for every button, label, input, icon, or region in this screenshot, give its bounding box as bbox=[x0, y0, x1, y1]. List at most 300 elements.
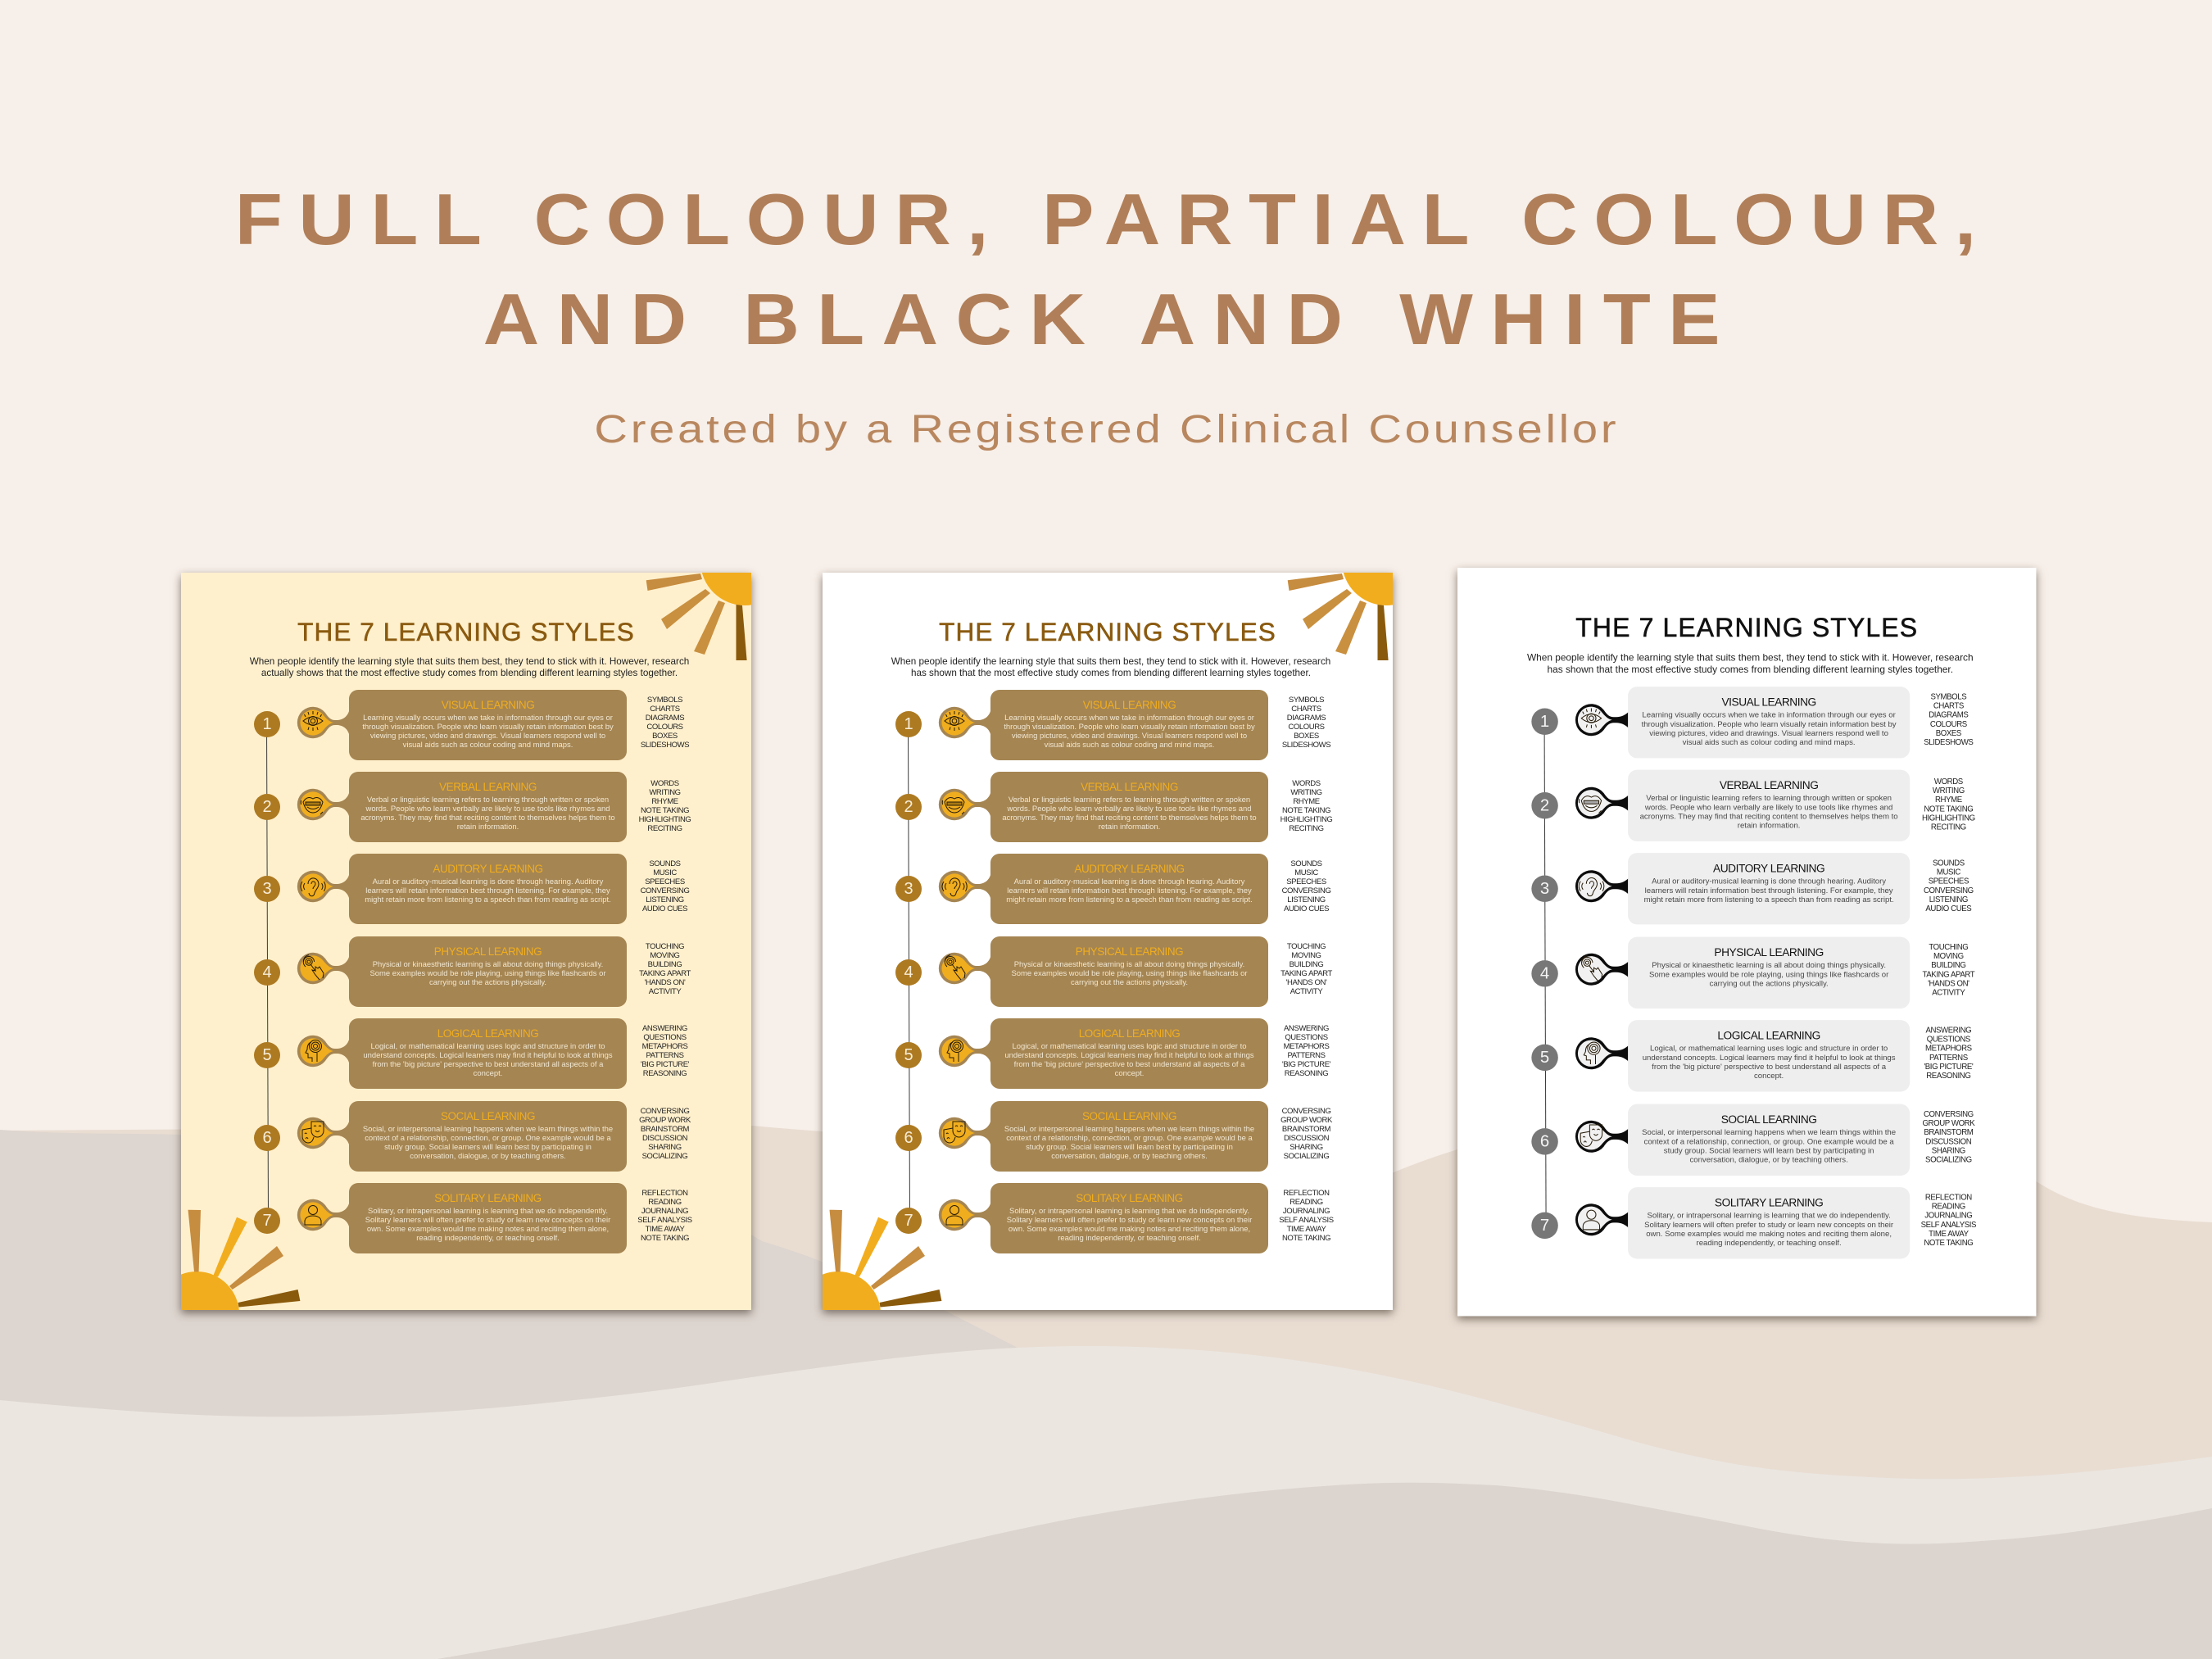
card: logical learning: from the 'big picture' perspective to best understand all aspects of a bbox=[373, 1060, 603, 1068]
keywords: logical: REASONING bbox=[1926, 1072, 1970, 1081]
card: logical learning: Logical, or mathematical learning uses logic and structure in order to bbox=[1650, 1044, 1888, 1053]
row 6: social bbox=[254, 1101, 691, 1172]
keywords: physical: ACTIVITY bbox=[649, 987, 681, 996]
icon: eye bbox=[297, 706, 349, 739]
keywords: verbal: RECITING bbox=[1931, 823, 1966, 832]
card: physical learning: Physical or kinaesthetic learning is all about doing things physically. bbox=[1014, 960, 1244, 968]
keywords: auditory: CONVERSING bbox=[1282, 886, 1330, 895]
card: visual learning: through visualization. People who learn visually retain information best by bbox=[1004, 723, 1255, 731]
number 6: 6 bbox=[262, 1129, 272, 1147]
number 3: 3 bbox=[904, 880, 913, 898]
sun: bottom left bbox=[823, 1209, 942, 1310]
keywords: physical: MOVING bbox=[1291, 951, 1321, 960]
keywords: auditory bbox=[641, 859, 690, 913]
keywords: auditory: CONVERSING bbox=[641, 886, 689, 895]
row 1: visual bbox=[1457, 687, 2036, 758]
row 5: logical bbox=[1457, 1020, 2036, 1091]
card: visual learning bbox=[990, 690, 1268, 760]
keywords: auditory: LISTENING bbox=[1929, 895, 1968, 904]
heading block bbox=[235, 179, 1976, 451]
row 2: verbal bbox=[254, 772, 691, 842]
icon: hand bbox=[297, 952, 349, 985]
keywords: solitary: TIME AWAY bbox=[646, 1225, 684, 1234]
keywords: logical: METAPHORS bbox=[1284, 1042, 1329, 1051]
icon: masks bbox=[297, 1117, 349, 1149]
card: auditory learning: AUDITORY LEARNING bbox=[433, 863, 543, 875]
card: physical learning: Physical or kinaesthetic learning is all about doing things physically. bbox=[373, 960, 603, 968]
number 4 bbox=[1531, 960, 1558, 987]
card: physical learning: carrying out the actions physically. bbox=[429, 978, 546, 986]
keywords: visual: SYMBOLS bbox=[647, 696, 682, 705]
keywords: verbal: NOTE TAKING bbox=[1924, 805, 1973, 814]
row 3: auditory bbox=[1457, 853, 2036, 924]
card: solitary learning: own. Some examples would me making notes and reciting them alone, bbox=[1009, 1224, 1250, 1234]
keywords: logical: 'BIG PICTURE' bbox=[641, 1060, 689, 1069]
main title: FULL COLOUR, PARTIAL COLOUR, bbox=[235, 179, 1976, 260]
card: solitary learning: reading independently, or teaching onself. bbox=[1697, 1239, 1842, 1248]
card: auditory learning: might retain more from listening to a speech than from reading as script. bbox=[1006, 895, 1253, 904]
keywords: auditory: AUDIO CUES bbox=[1284, 904, 1329, 913]
icon: person bbox=[1571, 1199, 1631, 1240]
row 1: visual bbox=[254, 690, 690, 760]
sun: top right bbox=[646, 573, 751, 660]
card: physical learning bbox=[990, 936, 1268, 1006]
card: social learning bbox=[990, 1101, 1268, 1172]
card: visual learning: VISUAL LEARNING bbox=[1721, 696, 1816, 708]
intro text bbox=[1501, 653, 2000, 675]
number 6 bbox=[1531, 1128, 1558, 1155]
keywords: physical: 'HANDS ON' bbox=[645, 978, 685, 987]
card: visual learning: viewing pictures, video and drawings. Visual learners respond well to bbox=[1649, 728, 1888, 738]
card: physical learning: Some examples would be role playing, using things like flashcards or bbox=[370, 968, 606, 978]
keywords: verbal: RHYME bbox=[1293, 797, 1320, 806]
card: solitary learning: Solitary, or intrapersonal learning is learning that we do independently. bbox=[1647, 1211, 1891, 1220]
card: auditory learning: learners will retain information best through listening. For example, they bbox=[365, 886, 610, 895]
intro text: When people identify the learning style that suits them best, they tend to stick with it. However, research bbox=[1527, 653, 1974, 664]
icon: person bbox=[297, 1199, 349, 1231]
keywords: logical: ANSWERING bbox=[642, 1024, 687, 1033]
keywords: logical: QUESTIONS bbox=[643, 1033, 687, 1042]
keywords: visual: BOXES bbox=[1294, 732, 1319, 741]
card: solitary learning: reading independently, or teaching onself. bbox=[416, 1234, 560, 1242]
card: verbal learning: words. People who learn verbally are likely to use tools like rhymes and bbox=[1008, 805, 1251, 813]
keywords: verbal: WRITING bbox=[649, 788, 681, 797]
card: physical learning: Some examples would be role playing, using things like flashcards or bbox=[1011, 968, 1247, 978]
keywords: solitary bbox=[637, 1189, 692, 1243]
row 3: auditory bbox=[895, 854, 1330, 924]
card: logical learning: LOGICAL LEARNING bbox=[1079, 1027, 1180, 1040]
number 5: 5 bbox=[904, 1046, 913, 1064]
card: solitary learning: Solitary learners will often prefer to study or learn new concepts on their bbox=[1644, 1220, 1893, 1229]
card: visual learning: Learning visually occurs when we take in information through our eyes or bbox=[363, 713, 613, 723]
number 4: 4 bbox=[1540, 964, 1549, 982]
keywords: verbal: RHYME bbox=[1935, 796, 1962, 805]
card: logical learning: concept. bbox=[1115, 1068, 1144, 1078]
card: social learning bbox=[1628, 1104, 1910, 1175]
card: auditory learning: might retain more from listening to a speech than from reading as script. bbox=[365, 895, 611, 904]
card: auditory learning: AUDITORY LEARNING bbox=[1074, 863, 1185, 875]
keywords: social: DISCUSSION bbox=[1925, 1138, 1971, 1147]
keywords: solitary: READING bbox=[1932, 1203, 1965, 1212]
card: auditory learning: learners will retain information best through listening. For example, they bbox=[1645, 886, 1893, 895]
keywords: logical: 'BIG PICTURE' bbox=[1924, 1063, 1973, 1072]
keywords: solitary bbox=[1906, 1194, 1991, 1249]
keywords: logical bbox=[1265, 1024, 1348, 1078]
keywords: social: SHARING bbox=[1290, 1143, 1323, 1152]
keywords: visual: SYMBOLS bbox=[1930, 693, 1966, 702]
keywords: visual: COLOURS bbox=[1288, 723, 1325, 732]
keywords: social: GROUP WORK bbox=[1281, 1116, 1332, 1125]
keywords: visual bbox=[641, 696, 690, 750]
keywords: visual: SLIDESHOWS bbox=[1282, 741, 1330, 750]
card: social learning: Social, or interpersonal learning happens when we learn things within the bbox=[1004, 1124, 1254, 1134]
card: logical learning: Logical, or mathematical learning uses logic and structure in order to bbox=[371, 1042, 605, 1050]
keywords: physical: TAKING APART bbox=[639, 969, 691, 978]
keywords: logical bbox=[1906, 1027, 1991, 1081]
number 1: 1 bbox=[262, 715, 272, 733]
icon: hand bbox=[939, 952, 990, 985]
keywords: social: CONVERSING bbox=[641, 1107, 689, 1116]
card: logical learning bbox=[349, 1018, 627, 1088]
card: social learning: SOCIAL LEARNING bbox=[1721, 1113, 1816, 1126]
card: logical learning: understand concepts. Logical learners may find it helpful to look at things bbox=[363, 1050, 613, 1060]
row 1: visual bbox=[895, 690, 1330, 760]
keywords: logical: QUESTIONS bbox=[1285, 1033, 1328, 1042]
number 2 bbox=[254, 794, 280, 820]
keywords: auditory: AUDIO CUES bbox=[1925, 904, 1971, 914]
card: visual learning: visual aids such as colour coding and mind maps. bbox=[1683, 738, 1856, 747]
keywords: social: SHARING bbox=[648, 1143, 682, 1152]
icon: hand bbox=[1571, 949, 1631, 990]
card: logical learning: from the 'big picture' perspective to best understand all aspects of a bbox=[1652, 1062, 1886, 1072]
icon: ear bbox=[939, 870, 990, 903]
keywords: verbal: RECITING bbox=[647, 824, 682, 833]
keywords: visual: DIAGRAMS bbox=[646, 714, 684, 723]
keywords: physical: BUILDING bbox=[1290, 960, 1323, 969]
keywords: verbal: WORDS bbox=[650, 779, 679, 788]
number 2: 2 bbox=[262, 798, 272, 816]
keywords: auditory: SPEECHES bbox=[645, 877, 685, 886]
keywords: logical bbox=[641, 1024, 689, 1078]
keywords: social: GROUP WORK bbox=[1922, 1119, 1974, 1129]
keywords: social: BRAINSTORM bbox=[1924, 1129, 1973, 1138]
keywords: physical: ACTIVITY bbox=[1932, 989, 1965, 998]
keywords: visual: COLOURS bbox=[1930, 720, 1967, 729]
card: physical learning: PHYSICAL LEARNING bbox=[434, 945, 542, 958]
keywords: logical: 'BIG PICTURE' bbox=[1282, 1060, 1330, 1069]
card: social learning: study group. Social learners will learn best by participating in bbox=[1026, 1142, 1233, 1152]
card: verbal learning: Verbal or linguistic learning refers to learning through written or spoken bbox=[1009, 795, 1250, 805]
keywords: solitary: JOURNALING bbox=[1283, 1207, 1330, 1216]
card: logical learning: concept. bbox=[474, 1068, 502, 1078]
card: solitary learning: SOLITARY LEARNING bbox=[434, 1192, 542, 1204]
card: social learning: SOCIAL LEARNING bbox=[1082, 1110, 1176, 1122]
keywords: solitary: SELF ANALYSIS bbox=[637, 1216, 692, 1225]
row 2: verbal bbox=[895, 772, 1332, 842]
keywords: solitary: READING bbox=[1290, 1198, 1323, 1207]
page title: THE 7 LEARNING STYLES bbox=[939, 617, 1276, 646]
card: solitary learning: SOLITARY LEARNING bbox=[1715, 1196, 1823, 1208]
card: social learning: SOCIAL LEARNING bbox=[441, 1110, 535, 1122]
number 5 bbox=[1531, 1045, 1558, 1071]
card: solitary learning: Solitary learners will often prefer to study or learn new concepts on their bbox=[1007, 1216, 1252, 1224]
icon: head bbox=[297, 1036, 349, 1067]
keywords: social bbox=[1265, 1107, 1348, 1161]
card: visual learning: viewing pictures, video and drawings. Visual learners respond well to bbox=[370, 731, 605, 741]
keywords: visual: CHARTS bbox=[650, 705, 680, 714]
card: logical learning: Logical, or mathematical learning uses logic and structure in order to bbox=[1013, 1042, 1246, 1050]
panel: partial colour white version bbox=[823, 573, 1393, 1310]
number 1 bbox=[254, 711, 280, 737]
keywords: logical: METAPHORS bbox=[642, 1042, 687, 1051]
number 6: 6 bbox=[904, 1129, 913, 1147]
number 4 bbox=[895, 959, 922, 986]
timeline line bbox=[908, 724, 910, 1221]
card: physical learning: Physical or kinaesthetic learning is all about doing things physically. bbox=[1652, 961, 1886, 970]
sun: bottom left bbox=[181, 1209, 300, 1310]
keywords: solitary: REFLECTION bbox=[1925, 1194, 1972, 1203]
keywords: verbal: HIGHLIGHTING bbox=[639, 815, 691, 824]
keywords: physical: 'HANDS ON' bbox=[1928, 980, 1969, 989]
number 3 bbox=[1531, 876, 1558, 902]
keywords: logical: PATTERNS bbox=[646, 1051, 684, 1060]
card: visual learning: viewing pictures, video and drawings. Visual learners respond well to bbox=[1012, 731, 1247, 741]
card: solitary learning bbox=[990, 1183, 1268, 1253]
keywords: visual: CHARTS bbox=[1291, 705, 1321, 714]
card: social learning: study group. Social learners will learn best by participating in bbox=[384, 1142, 592, 1152]
keywords: social: SOCIALIZING bbox=[1284, 1152, 1329, 1161]
row 6: social bbox=[823, 1101, 1393, 1172]
keywords: visual bbox=[1906, 693, 1991, 748]
row 4: physical bbox=[1457, 937, 2036, 1009]
keywords: visual: SLIDESHOWS bbox=[1924, 738, 1973, 748]
number 5: 5 bbox=[262, 1046, 272, 1064]
keywords: solitary: READING bbox=[648, 1198, 682, 1207]
number 4: 4 bbox=[262, 963, 272, 981]
card: logical learning bbox=[990, 1018, 1268, 1088]
card: verbal learning: retain information. bbox=[1099, 823, 1160, 831]
keywords: logical: QUESTIONS bbox=[1927, 1036, 1970, 1045]
keywords: auditory: CONVERSING bbox=[1924, 886, 1974, 895]
number 6: 6 bbox=[1540, 1132, 1549, 1151]
number 4: 4 bbox=[904, 963, 913, 981]
keywords: solitary: SELF ANALYSIS bbox=[1921, 1221, 1976, 1230]
row 5: logical bbox=[254, 1018, 689, 1089]
keywords: physical: TOUCHING bbox=[646, 942, 684, 951]
number 1: 1 bbox=[1540, 713, 1549, 731]
card: auditory learning bbox=[349, 854, 627, 924]
card: auditory learning: might retain more from listening to a speech than from reading as script. bbox=[1644, 895, 1894, 904]
number 2 bbox=[895, 794, 922, 820]
keywords: visual: SLIDESHOWS bbox=[641, 741, 689, 750]
number 2: 2 bbox=[904, 798, 913, 816]
card: solitary learning: Solitary, or intrapersonal learning is learning that we do independently. bbox=[1009, 1206, 1249, 1216]
keywords: logical: REASONING bbox=[1285, 1069, 1328, 1078]
number 7: 7 bbox=[262, 1212, 272, 1230]
card: verbal learning: retain information. bbox=[1738, 821, 1800, 830]
number 6 bbox=[254, 1125, 280, 1151]
card: auditory learning: Aural or auditory-musical learning is done through hearing. Auditory bbox=[373, 877, 603, 886]
card: visual learning: through visualization. People who learn visually retain information best by bbox=[1642, 719, 1897, 728]
keywords: logical: PATTERNS bbox=[1287, 1051, 1326, 1060]
keywords: logical: METAPHORS bbox=[1925, 1045, 1972, 1054]
number 3: 3 bbox=[1540, 880, 1549, 898]
keywords: solitary: REFLECTION bbox=[1283, 1189, 1330, 1198]
card: solitary learning bbox=[1628, 1187, 1910, 1258]
intro text: actually shows that the most effective study comes from blending different learning styles together. bbox=[261, 668, 678, 678]
card: solitary learning: own. Some examples would me making notes and reciting them alone, bbox=[367, 1224, 609, 1234]
keywords: physical: TAKING APART bbox=[1281, 969, 1332, 978]
keywords: solitary: NOTE TAKING bbox=[1282, 1234, 1330, 1243]
card: visual learning: through visualization. People who learn visually retain information best by bbox=[362, 723, 614, 731]
icon: eye bbox=[939, 706, 990, 739]
keywords: verbal bbox=[1906, 777, 1991, 832]
card: verbal learning: acronyms. They may find that reciting content to themselves helps them to bbox=[1640, 812, 1898, 821]
row 3: auditory bbox=[254, 854, 690, 924]
card: auditory learning: learners will retain information best through listening. For example, they bbox=[1007, 886, 1252, 895]
intro text: has shown that the most effective study comes from blending different learning styles together. bbox=[911, 668, 1311, 678]
card: physical learning: PHYSICAL LEARNING bbox=[1714, 945, 1824, 959]
card: physical learning bbox=[349, 936, 627, 1006]
icon: eye bbox=[1571, 699, 1631, 741]
keywords: visual: BOXES bbox=[652, 732, 678, 741]
keywords: solitary: TIME AWAY bbox=[1287, 1225, 1326, 1234]
icon: masks bbox=[935, 1113, 994, 1154]
keywords: social: DISCUSSION bbox=[642, 1134, 687, 1143]
keywords: social bbox=[1906, 1110, 1991, 1165]
keywords: verbal bbox=[1281, 779, 1332, 833]
row 7: solitary bbox=[823, 1183, 1393, 1253]
number 3 bbox=[895, 876, 922, 902]
keywords: social: BRAINSTORM bbox=[641, 1125, 689, 1134]
row 2: verbal bbox=[1457, 770, 2036, 841]
keywords: social: DISCUSSION bbox=[1284, 1134, 1329, 1143]
row 7: solitary bbox=[254, 1183, 692, 1253]
card: verbal learning: VERBAL LEARNING bbox=[439, 781, 537, 793]
card: verbal learning: acronyms. They may find that reciting content to themselves helps them to bbox=[1002, 813, 1257, 823]
keywords: verbal: HIGHLIGHTING bbox=[1922, 814, 1975, 823]
keywords: verbal: NOTE TAKING bbox=[641, 806, 689, 815]
card: verbal learning: acronyms. They may find that reciting content to themselves helps them to bbox=[360, 813, 615, 823]
card: logical learning: from the 'big picture' perspective to best understand all aspects of a bbox=[1014, 1060, 1244, 1068]
card: social learning: Social, or interpersonal learning happens when we learn things within the bbox=[1642, 1128, 1896, 1137]
keywords: auditory: LISTENING bbox=[1287, 895, 1326, 904]
number 3 bbox=[254, 876, 280, 902]
keywords: visual: DIAGRAMS bbox=[1929, 711, 1968, 720]
card: physical learning: carrying out the actions physically. bbox=[1710, 979, 1829, 988]
card: social learning: conversation, dialogue, or by teaching others. bbox=[410, 1152, 566, 1160]
main title: AND BLACK AND WHITE bbox=[483, 279, 1720, 360]
keywords: social: SOCIALIZING bbox=[642, 1152, 687, 1161]
card: auditory learning: Aural or auditory-musical learning is done through hearing. Auditory bbox=[1652, 877, 1886, 886]
card: auditory learning: Aural or auditory-musical learning is done through hearing. Auditory bbox=[1014, 877, 1244, 886]
card: verbal learning bbox=[1628, 770, 1910, 841]
keywords: physical: TOUCHING bbox=[1287, 942, 1326, 951]
keywords: solitary: JOURNALING bbox=[641, 1207, 688, 1216]
number 1: 1 bbox=[904, 715, 913, 733]
keywords: verbal: WRITING bbox=[1290, 788, 1322, 797]
intro text bbox=[249, 656, 689, 678]
keywords: logical: ANSWERING bbox=[1925, 1027, 1971, 1036]
card: visual learning: VISUAL LEARNING bbox=[442, 699, 534, 711]
card: solitary learning: reading independently, or teaching onself. bbox=[1058, 1234, 1201, 1242]
keywords: auditory: LISTENING bbox=[646, 895, 684, 904]
keywords: visual bbox=[1282, 696, 1330, 750]
card: verbal learning: Verbal or linguistic learning refers to learning through written or spoken bbox=[1646, 794, 1892, 803]
card: verbal learning: words. People who learn verbally are likely to use tools like rhymes and bbox=[1645, 803, 1892, 812]
card: social learning: context of a relationship, connection, or group. One example would be a bbox=[365, 1134, 611, 1142]
keywords: auditory: AUDIO CUES bbox=[642, 904, 687, 913]
card: physical learning: PHYSICAL LEARNING bbox=[1076, 945, 1183, 958]
number 7 bbox=[1531, 1213, 1558, 1239]
keywords: visual: CHARTS bbox=[1933, 702, 1964, 711]
keywords: auditory bbox=[1906, 859, 1991, 914]
card: verbal learning bbox=[990, 772, 1268, 842]
card: solitary learning: Solitary, or intrapersonal learning is learning that we do independently. bbox=[368, 1206, 608, 1216]
card: solitary learning: SOLITARY LEARNING bbox=[1076, 1192, 1183, 1204]
icon: person bbox=[935, 1194, 994, 1235]
keywords: physical: TAKING APART bbox=[1922, 971, 1974, 980]
keywords: physical: MOVING bbox=[650, 951, 680, 960]
card: visual learning: Learning visually occurs when we take in information through our eyes or bbox=[1004, 713, 1254, 723]
keywords: logical: PATTERNS bbox=[1929, 1054, 1968, 1063]
number 7: 7 bbox=[904, 1212, 913, 1230]
card: auditory learning: AUDITORY LEARNING bbox=[1713, 862, 1824, 874]
card: physical learning bbox=[1628, 937, 1910, 1008]
keywords: solitary bbox=[1265, 1189, 1348, 1243]
keywords: social bbox=[639, 1107, 691, 1161]
card: logical learning: understand concepts. Logical learners may find it helpful to look at things bbox=[1004, 1050, 1254, 1060]
keywords: logical: REASONING bbox=[643, 1069, 687, 1078]
row 4: physical bbox=[254, 936, 691, 1007]
keywords: social: CONVERSING bbox=[1924, 1110, 1974, 1119]
number 5: 5 bbox=[1540, 1049, 1549, 1067]
intro text: When people identify the learning style that suits them best, they tend to stick with it. However, research bbox=[891, 656, 1330, 667]
card: social learning: context of a relationship, connection, or group. One example would be a bbox=[1006, 1134, 1253, 1142]
keywords: verbal: WORDS bbox=[1292, 779, 1321, 788]
keywords: physical: TOUCHING bbox=[1929, 943, 1968, 952]
number 7 bbox=[895, 1208, 922, 1234]
number 2 bbox=[1531, 792, 1558, 819]
keywords: verbal: RHYME bbox=[651, 797, 678, 806]
keywords: physical bbox=[1906, 943, 1991, 998]
card: physical learning: carrying out the actions physically. bbox=[1071, 978, 1188, 986]
card: verbal learning: Verbal or linguistic learning refers to learning through written or spoken bbox=[367, 795, 609, 805]
card: visual learning: VISUAL LEARNING bbox=[1083, 699, 1176, 711]
keywords: solitary: NOTE TAKING bbox=[641, 1234, 689, 1243]
keywords: physical: ACTIVITY bbox=[1290, 987, 1322, 996]
intro text: When people identify the learning style that suits them best, they tend to stick with it. However, research bbox=[250, 656, 689, 667]
card: social learning: conversation, dialogue, or by teaching others. bbox=[1689, 1155, 1848, 1164]
intro text bbox=[891, 656, 1330, 678]
card: verbal learning: words. People who learn verbally are likely to use tools like rhymes and bbox=[366, 805, 610, 813]
row 4: physical bbox=[895, 936, 1332, 1007]
keywords: social: CONVERSING bbox=[1282, 1107, 1330, 1116]
card: logical learning: concept. bbox=[1754, 1072, 1784, 1081]
keywords: auditory: SOUNDS bbox=[1933, 859, 1965, 868]
card: social learning bbox=[349, 1101, 627, 1172]
number 6 bbox=[895, 1125, 922, 1151]
keywords: physical: BUILDING bbox=[648, 960, 682, 969]
keywords: solitary: SELF ANALYSIS bbox=[1279, 1216, 1334, 1225]
keywords: verbal: RECITING bbox=[1289, 824, 1324, 833]
icon: ear bbox=[297, 870, 349, 903]
icon: masks bbox=[1571, 1116, 1631, 1158]
keywords: visual: COLOURS bbox=[646, 723, 683, 732]
keywords: physical bbox=[1281, 942, 1332, 996]
keywords: solitary: JOURNALING bbox=[1924, 1212, 1972, 1221]
card: visual learning bbox=[1628, 687, 1910, 758]
